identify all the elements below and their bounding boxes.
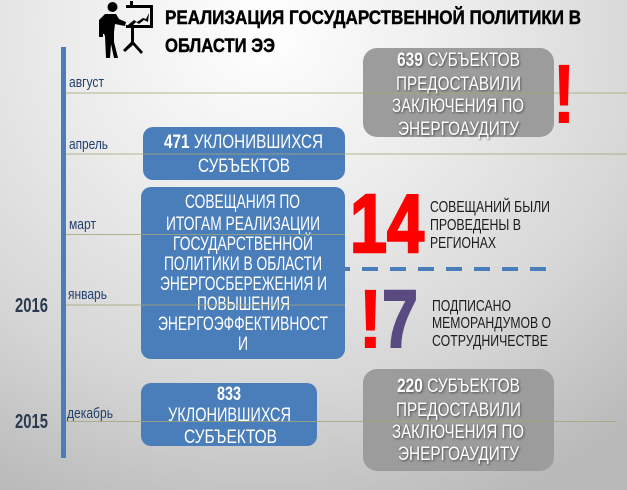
panel: 639 subjects bbox=[363, 48, 554, 140]
month labels: декабрь bbox=[67, 406, 113, 422]
panel: 833 evaders bbox=[141, 383, 317, 448]
text: memoranda signed: СОТРУДНИЧЕСТВЕ bbox=[432, 333, 548, 350]
text: meetings in regions: РЕГИОНАХ bbox=[430, 235, 496, 252]
panel: meetings on results: ПОВЫШЕНИЯ bbox=[197, 294, 290, 315]
panel: 639 subjects: ЗАКЛЮЧЕНИЯ ПО bbox=[392, 96, 524, 117]
panel: 833 evaders: 833 bbox=[217, 384, 241, 405]
big number 7 with exclamation mark: 7 bbox=[382, 274, 418, 365]
title bbox=[165, 5, 581, 57]
panel: meetings on results: ГОСУДАРСТВЕННОЙ bbox=[173, 233, 313, 255]
text: memoranda signed: МЕМОРАНДУМОВ О bbox=[432, 315, 551, 332]
exclamation mark: ! bbox=[552, 47, 576, 141]
big number 7 with exclamation mark: ! bbox=[358, 272, 384, 366]
dashed divider bbox=[334, 267, 547, 271]
panel: 220 subjects bbox=[363, 369, 554, 471]
panel: meetings on results bbox=[141, 187, 345, 359]
big number 14: 14 bbox=[350, 177, 424, 270]
panel: 220 subjects: ЭНЕРГОАУДИТУ bbox=[398, 444, 520, 465]
month labels bbox=[67, 75, 113, 422]
panel: meetings on results: ИТОГАМ РЕАЛИЗАЦИИ bbox=[166, 214, 320, 235]
panel: 639 subjects: ПРЕДОСТАВИЛИ bbox=[396, 74, 521, 95]
panel: meetings on results: ЭНЕРГОЭФФЕКТИВНОСТ bbox=[158, 314, 328, 335]
panel: 471 evaders: СУБЪЕКТОВ bbox=[198, 156, 290, 177]
panel: 220 subjects: ЗАКЛЮЧЕНИЯ ПО bbox=[392, 422, 524, 443]
icon: presenter at chart board bbox=[99, 1, 153, 58]
text: meetings in regions bbox=[430, 197, 550, 252]
panel: 639 subjects: 639 СУБЪЕКТОВ bbox=[397, 50, 520, 71]
panel: 639 subjects: ЭНЕРГОАУДИТУ bbox=[398, 119, 520, 140]
panel: 471 evaders: 471 УКЛОНИВШИХСЯ bbox=[164, 132, 323, 153]
month labels: март bbox=[69, 217, 96, 233]
text: memoranda signed: ПОДПИСАНО bbox=[432, 298, 511, 315]
text: meetings in regions: ПРОВЕДЕНЫ В bbox=[430, 217, 521, 234]
panel: meetings on results: ЭНЕРГОСБЕРЕЖЕНИЯ И bbox=[160, 274, 327, 295]
timeline vertical bar bbox=[61, 47, 66, 458]
text: memoranda signed bbox=[432, 298, 551, 350]
panel: meetings on results: СОВЕЩАНИЯ ПО bbox=[185, 192, 300, 213]
big number 7 with exclamation mark bbox=[358, 272, 418, 366]
panel: 471 evaders bbox=[143, 127, 345, 180]
text: meetings in regions: СОВЕЩАНИЙ БЫЛИ bbox=[430, 197, 550, 216]
year 2015: 2015 bbox=[15, 410, 48, 433]
panel: 833 evaders: СУБЪЕКТОВ bbox=[184, 427, 277, 448]
title: ОБЛАСТИ ЭЭ bbox=[165, 35, 275, 57]
year 2016: 2016 bbox=[15, 294, 48, 317]
month labels: январь bbox=[68, 287, 107, 303]
panel: 220 subjects: ПРЕДОСТАВИЛИ bbox=[396, 400, 521, 421]
month labels: апрель bbox=[69, 137, 108, 153]
panel: 220 subjects: 220 СУБЪЕКТОВ bbox=[397, 376, 520, 397]
month labels: август bbox=[69, 75, 104, 91]
panel: meetings on results: ПОЛИТИКИ В ОБЛАСТИ bbox=[164, 254, 322, 275]
panel: 833 evaders: УКЛОНИВШИХСЯ bbox=[168, 405, 291, 426]
panel: meetings on results: И bbox=[238, 334, 248, 355]
